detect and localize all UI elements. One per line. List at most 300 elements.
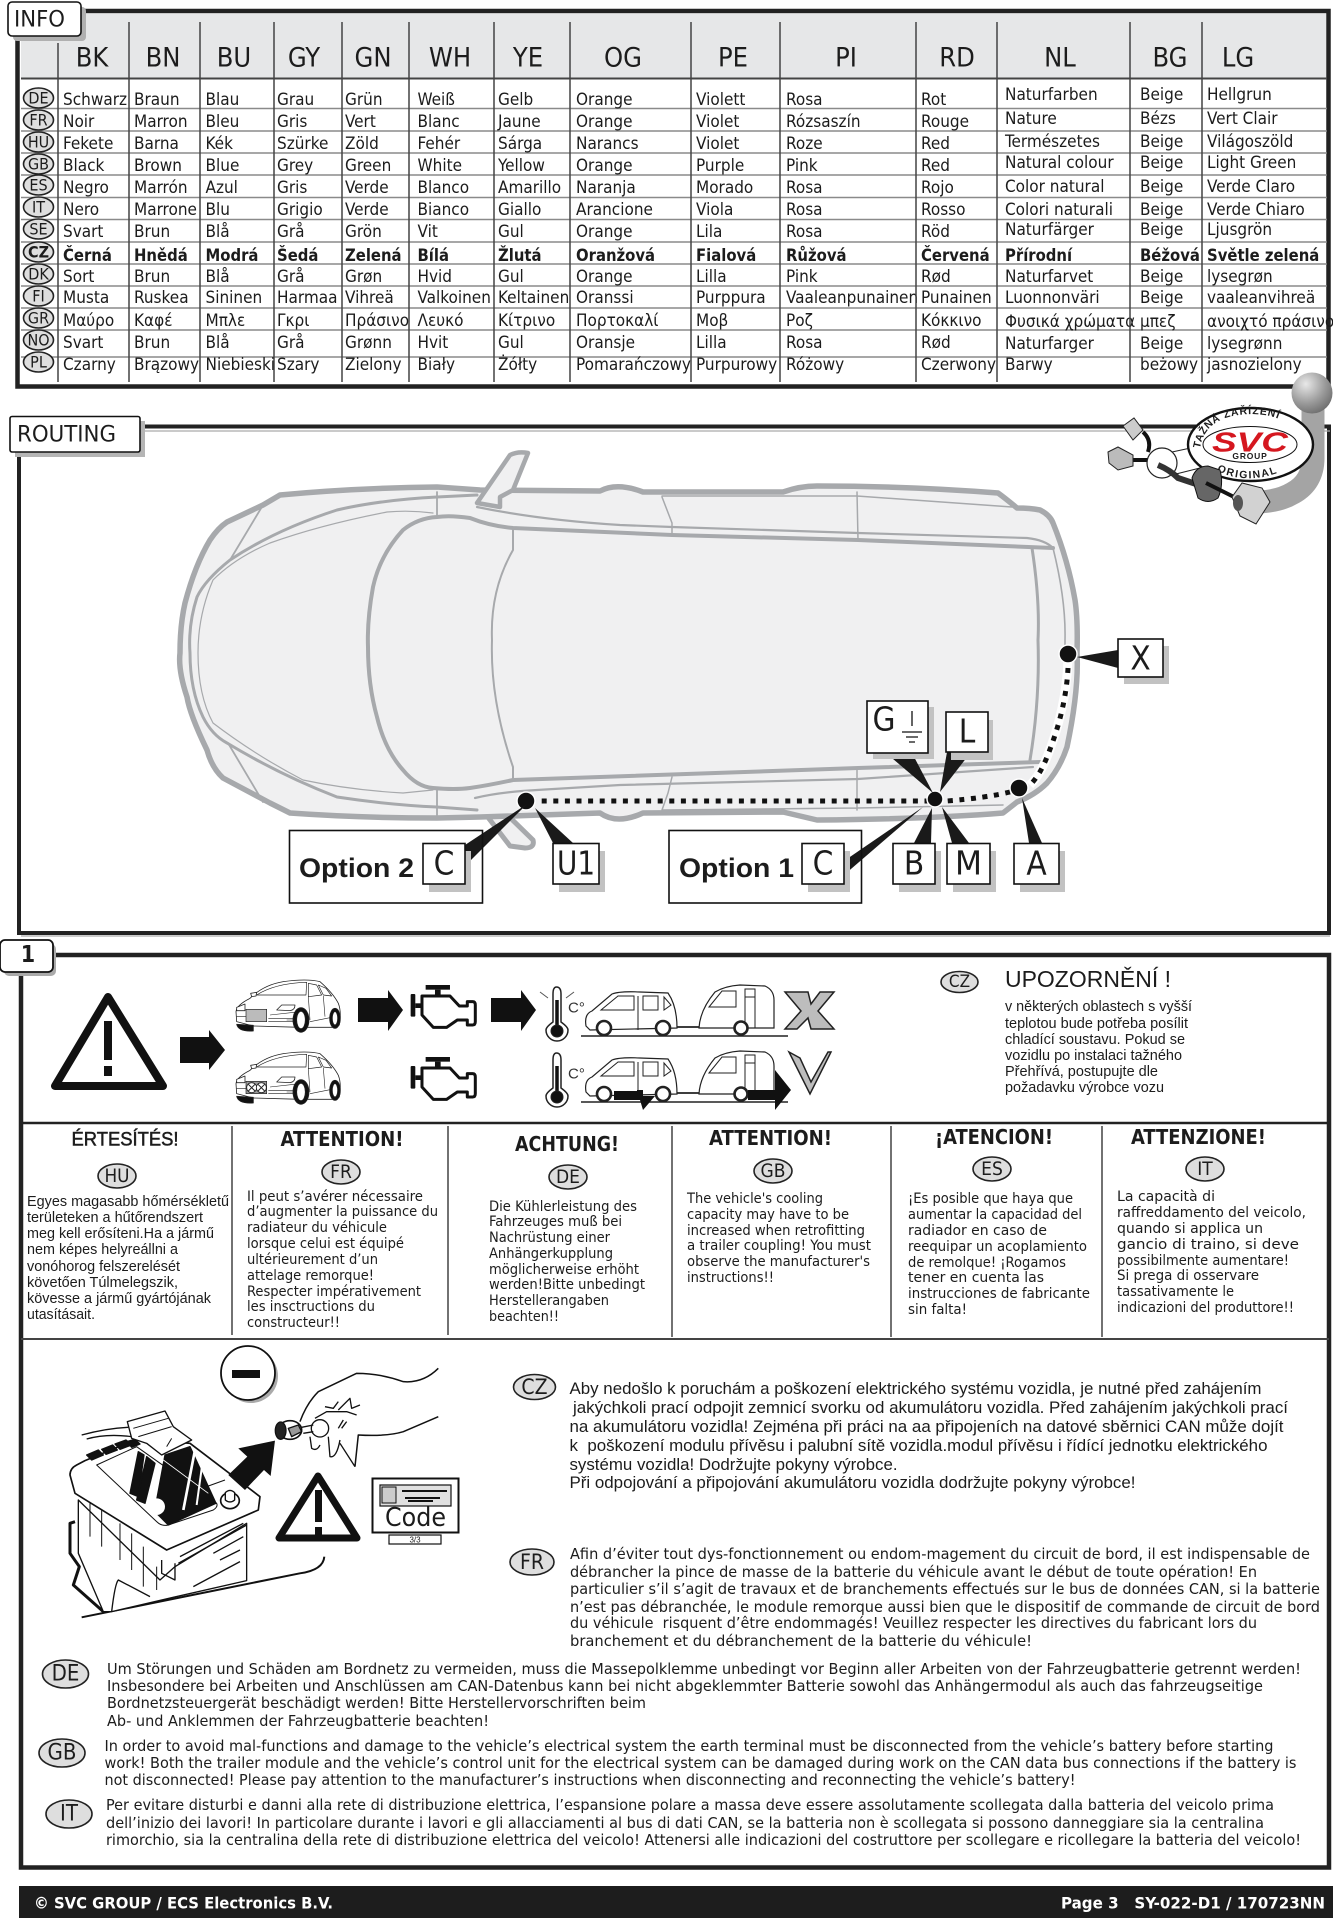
table rows: Gris [277, 178, 307, 198]
icon: warning triangle small [279, 1476, 357, 1538]
badge: CZ: CZ [949, 972, 970, 992]
column headers: GN [354, 42, 392, 74]
notice: ES: ¡ATENCION! [935, 1125, 1053, 1149]
option box 2 [290, 830, 482, 903]
table rows: Gul [498, 267, 524, 287]
notice: HU: Egyes magasabb hőmérsékletű [27, 1194, 229, 1210]
notice: ES [908, 1125, 1090, 1318]
table rows: Orange [576, 267, 633, 287]
table rows: μπεζ [1140, 312, 1176, 332]
language badges: DK [28, 264, 49, 284]
notice: HU: ÉRTESÍTÉS! [72, 1130, 178, 1150]
table rows: Bézs [1140, 109, 1176, 129]
table rows: Kék [206, 134, 233, 154]
table rows: Blu [206, 200, 230, 220]
table rows: Violett [696, 90, 745, 110]
table rows: Sininen [206, 288, 262, 308]
text: GB battery: In order to avoid mal-functions and damage to the vehicle’s electrical system the earth terminal must be disconnected from the vehicle’s battery before starting [104, 1737, 1274, 1755]
label: X: X [1130, 638, 1151, 678]
text: CZ cooling [1005, 999, 1192, 1096]
table rows: Luonnonväri [1005, 288, 1100, 308]
table rows: Colori naturali [1005, 200, 1113, 220]
text: CZ cooling: požadavku výrobce vozu [1005, 1080, 1164, 1096]
notice: IT: IT [1197, 1158, 1213, 1180]
table rows: Gul [498, 333, 524, 353]
notice: HU: kövesse a jármű gyártójának [27, 1291, 212, 1307]
icon: cross mark [785, 992, 834, 1029]
heading: UPOZORNĚNÍ: UPOZORNĚNÍ ! [1005, 966, 1171, 992]
table rows: Béžová [1140, 246, 1200, 264]
table rows: jasnozielony [1206, 355, 1302, 375]
column headers: WH [429, 42, 471, 74]
notice: FR: radiateur du véhicule [247, 1220, 387, 1236]
table rows: Szary [277, 355, 319, 375]
notice: GB [686, 1126, 871, 1286]
language badges: PL [30, 352, 47, 372]
table rows: Világoszöld [1207, 132, 1293, 152]
label: G with ground symbol: G [872, 700, 896, 738]
table rows: Verde Claro [1207, 177, 1295, 197]
text: CZ battery: Aby nedošlo k poruchám a poškození elektrického systému vozidla, je nutné před zahájením [570, 1380, 1262, 1398]
table rows: Ruskea [134, 288, 189, 308]
label: C option 1 [802, 844, 850, 892]
table rows: Rojo [921, 178, 954, 198]
icon: warning triangle [55, 997, 163, 1086]
notice: IT: La capacità di [1117, 1189, 1215, 1205]
notice: DE: Nachrüstung einer [489, 1230, 611, 1246]
table rows: Vert [345, 112, 376, 132]
table rows: Grün [345, 90, 383, 110]
text: IT battery: dell’inizio dei lavori! In particolare durante i lavori e gli allacciamenti al bus di dati CAN, se la batteria non è scollegata si possono danneggiare sia la centralina [106, 1814, 1264, 1832]
table rows: Beige [1140, 85, 1183, 105]
table rows: Grå [277, 221, 305, 242]
notice: FR: lorsque celui est équipé [247, 1236, 404, 1252]
table rows: Weiß [418, 90, 455, 110]
table rows: Beige [1140, 334, 1183, 354]
notice: ES: ¡Es posible que haya que [908, 1191, 1073, 1207]
frame [19, 426, 1329, 933]
table rows: Roze [786, 134, 823, 154]
table rows: Blå [206, 221, 230, 242]
icon: engine warning bottom [411, 1057, 475, 1099]
table rows: Γκρι [277, 311, 309, 331]
table rows: Jaune [497, 112, 541, 132]
text: GB battery: GB [48, 1740, 76, 1766]
table rows: Vaaleanpunainen [786, 288, 918, 308]
table rows: vaaleanvihreä [1207, 288, 1315, 308]
icon: car and caravan with arrow [546, 1051, 791, 1110]
table rows: Természetes [1004, 132, 1100, 152]
option box 1: Option 1 [679, 853, 794, 883]
towbar [1255, 400, 1313, 502]
table rows: Μοβ [696, 311, 728, 331]
column headers: RD [939, 42, 975, 74]
notice: ES: ES [981, 1158, 1003, 1180]
option box 1 [669, 830, 862, 903]
table rows: Viola [696, 200, 733, 220]
table rows: Beige [1140, 267, 1183, 287]
icon: car with fan [236, 1052, 340, 1104]
notice: GB: increased when retrofitting [687, 1223, 865, 1239]
table rows: Biały [418, 355, 455, 375]
notice: DE [489, 1132, 645, 1325]
table rows: White [418, 156, 462, 176]
notice: HU: HU [104, 1165, 130, 1187]
text: DE battery: Um Störungen und Schäden am Bordnetz zu vermeiden, muss die Massepolklemme unbedingt vor Beginn aller Arbeiten von der Fahrzeugbatterie getrennt werden! [107, 1660, 1301, 1678]
table rows: Blå [206, 266, 230, 287]
label: C option 1: C [813, 844, 833, 882]
icon: radio code: 3/3 [409, 1536, 421, 1544]
table rows: Pomarańczowy [576, 355, 691, 375]
column headers: PE [718, 42, 748, 74]
table rows: Grigio [277, 200, 323, 220]
table rows: Hvid [418, 267, 452, 287]
table rows: Λευκό [418, 311, 463, 331]
notice: GB: GB [761, 1160, 785, 1182]
table rows: Κίτρινο [498, 311, 555, 331]
table rows: Fekete [63, 134, 113, 154]
table rows: Valkoinen [418, 288, 491, 308]
table rows: Green [345, 156, 391, 176]
label: C option 2 [423, 844, 471, 892]
table rows: Gul [498, 222, 524, 242]
language badges: ES [29, 176, 48, 194]
table rows: Red [921, 134, 950, 154]
panel: INFO colour table [8, 2, 1333, 386]
notice: HU: utasításait. [27, 1307, 95, 1323]
notice: IT: gancio di traino, si deve [1117, 1237, 1299, 1253]
table rows: Beige [1140, 132, 1183, 152]
table rows: Modrá [206, 246, 258, 264]
notice: HU: nem képes helyreállni a [27, 1242, 179, 1258]
table rows: ανοιχτό πράσινο [1207, 312, 1333, 332]
table rows: Orange [576, 222, 633, 242]
logo oval: TAŽNÁ ZAŘÍZENÍ [1192, 404, 1282, 448]
table rows: Verde Chiaro [1207, 200, 1305, 220]
language badges: FI [32, 286, 45, 306]
table rows: Beige [1140, 153, 1183, 173]
table rows: Naturfärger [1005, 220, 1095, 240]
table rows: Blau [206, 90, 239, 110]
logo: SVC towbar and wiring kit [1108, 372, 1332, 525]
notice: IT: possibilmente aumentare! [1117, 1253, 1289, 1269]
text: CZ cooling: vozidlu po instalaci tažného [1005, 1048, 1182, 1064]
label: C option 2: C [434, 844, 454, 882]
text: CZ battery [514, 1374, 1288, 1492]
table rows: Harmaa [277, 288, 338, 308]
table rows: Rot [921, 90, 946, 110]
table rows: Šedá [277, 246, 318, 264]
notice: DE: beachten!! [489, 1309, 559, 1325]
icon: radio code: Code [385, 1503, 446, 1533]
table rows: Violet [696, 112, 739, 132]
text: FR battery: n’est pas débranchée, le module remorque aussi bien que le dispositif de commande de circuit de bord [570, 1598, 1320, 1616]
table rows: Μαύρο [63, 311, 114, 331]
table rows: Zelená [345, 246, 402, 264]
label: U1 [553, 844, 605, 892]
notice: HU: területeken a hűtőrendszert [27, 1210, 203, 1226]
notice: FR: ultérieurement d’un [247, 1252, 378, 1268]
label: X [1118, 638, 1169, 684]
icon: minus terminal [221, 1346, 278, 1403]
text: CZ cooling: teplotou bude potřeba posílit [1005, 1016, 1188, 1032]
text: FR battery: particulier s’il s’agit de travaux et de branchements effectués sur le bus de données CAN, si la batterie [570, 1580, 1320, 1598]
table rows: Žlutá [498, 246, 542, 264]
notice: GB: The vehicle's cooling [686, 1191, 823, 1207]
table rows: Κόκκινο [921, 311, 981, 331]
table rows: Brun [134, 222, 170, 242]
notice: DE: Fahrzeuges muß bei [489, 1214, 622, 1230]
logo oval: ORIGINAL [1218, 465, 1277, 478]
table rows: Černá [63, 246, 112, 264]
notice: HU: követően Túlmelegszik, [27, 1275, 178, 1291]
option box 2: Option 2 [299, 853, 414, 883]
notice: IT: raffreddamento del veicolo, [1117, 1205, 1306, 1221]
table rows: Verde [345, 178, 389, 198]
table rows: Blanc [418, 112, 460, 132]
text: FR battery: branchement et du débranchement de la batterie du véhicule! [570, 1632, 1032, 1650]
table rows [63, 85, 1333, 375]
notice: DE: DE [556, 1166, 580, 1188]
label: ROUTING [10, 416, 145, 457]
table rows: Naturfarben [1005, 85, 1098, 105]
flange and socket [1192, 466, 1270, 524]
table rows: Czerwony [921, 355, 996, 375]
arrow [358, 990, 403, 1031]
table rows: Naturfarvet [1005, 267, 1093, 287]
table rows: Φυσικά χρώματα [1005, 312, 1135, 332]
label: U1: U1 [557, 844, 595, 882]
table rows: Vihreä [345, 288, 394, 308]
table rows: Gris [277, 112, 307, 132]
table rows: Πράσινο [345, 311, 409, 331]
label: B [893, 844, 941, 892]
table rows: Azul [206, 178, 238, 198]
table rows: Gelb [498, 90, 533, 110]
table rows: Purple [696, 156, 744, 176]
table rows: Röd [921, 222, 950, 242]
table rows: Rouge [921, 112, 969, 132]
text: IT battery [46, 1796, 1301, 1849]
language badges: NO [27, 330, 50, 350]
table rows: Bleu [206, 112, 239, 132]
icon: engine warning top [411, 985, 475, 1027]
language badges: DE [28, 88, 49, 108]
table rows: Naranja [576, 178, 636, 198]
notice: ES: instrucciones de fabricante [908, 1286, 1090, 1302]
table rows: Blanco [418, 178, 469, 198]
table rows: Color natural [1005, 177, 1104, 197]
table rows: Ljusgrön [1207, 220, 1272, 240]
text: CZ cooling: Přehřívá, postupujte dle [1005, 1064, 1158, 1080]
label: G with ground symbol [867, 700, 934, 759]
table rows: Keltainen [498, 288, 569, 308]
table rows: Arancione [576, 200, 653, 220]
text: FR battery: Afin d’éviter tout dys-fonctionnement ou endom-magement du circuit de bord, il est indispensable de [570, 1545, 1310, 1563]
notice: IT [1117, 1125, 1306, 1316]
column headers: BU [217, 42, 251, 74]
table rows: Rosa [786, 333, 823, 353]
table rows: Morado [696, 178, 753, 198]
notice: HU: meg kell erősíteni.Ha a jármű [27, 1226, 214, 1242]
notice: IT: quando si applica un [1117, 1221, 1263, 1237]
text: FR battery: FR [520, 1550, 544, 1574]
table rows: Rosa [786, 200, 823, 220]
table rows: Grå [277, 266, 305, 287]
text: FR battery: débrancher la pince de masse de la batterie du véhicule avant le début de toute opération! En [570, 1563, 1257, 1581]
notice: GB: a trailer coupling! You must [687, 1238, 871, 1254]
notice: FR: les insctructions du [247, 1299, 375, 1315]
table rows: Grön [345, 222, 382, 242]
wiring harness [1108, 418, 1200, 484]
notice: DE: Die Kühlerleistung des [489, 1199, 637, 1215]
notice: HU: vonóhorog felszerelését [27, 1259, 180, 1275]
table rows: Rosa [786, 178, 823, 198]
column headers: BG [1152, 42, 1188, 74]
text: CZ battery: na akumulátoru vozidla! Zejména při práci na aa připojeních na datové sběrnici CAN může dojít [570, 1418, 1284, 1436]
table rows: Blue [206, 156, 239, 176]
notice: IT: indicazioni del produttore!! [1117, 1300, 1294, 1316]
table rows: Fialová [696, 246, 756, 264]
table rows: Grau [277, 90, 314, 110]
column headers: OG [604, 42, 642, 74]
table rows: Natural colour [1005, 153, 1114, 173]
table rows: Lila [696, 222, 722, 242]
notice: ES: de remolque! ¡Rogamos [908, 1255, 1066, 1271]
panel: ROUTING [10, 416, 1330, 936]
table rows: Marron [134, 112, 188, 132]
table rows: Noir [63, 112, 95, 132]
text: GB battery: work! Both the trailer module and the vehicle’s control unit for the electrical system can be damaged during work on the CAN data bus connections if the battery is [104, 1754, 1296, 1772]
text: IT battery: Per evitare disturbi e danni alla rete di distribuzione elettrica, l’espansione polare a massa deve essere assolutamente scollegata dalla batteria del veicolo prima [106, 1796, 1274, 1814]
table rows: Hellgrun [1207, 85, 1272, 105]
table rows: Grønn [345, 333, 392, 353]
table rows: Brown [134, 156, 182, 176]
table rows: Purpurowy [696, 355, 777, 375]
table rows: Pink [786, 156, 818, 176]
table rows: Red [921, 156, 950, 176]
notice: ES: reequipar un acoplamiento [908, 1239, 1087, 1255]
table rows: Oranžová [576, 246, 655, 264]
table rows: Barwy [1005, 355, 1053, 375]
table rows: Narancs [576, 134, 639, 154]
logo oval: SVC [1212, 426, 1289, 458]
table rows: Orange [576, 112, 633, 132]
text: CZ battery: jakýchkoli prací odpojit zemnicí svorku od akumulátoru vozidla. Před zahájením jakýchkoli prací [572, 1399, 1288, 1417]
table rows: Bianco [418, 200, 469, 220]
table rows: Beige [1140, 288, 1183, 308]
label: 1 [0, 940, 56, 976]
label: INFO [8, 2, 86, 41]
text: FR battery [510, 1545, 1320, 1650]
label: 1: 1 [21, 942, 35, 968]
notice: FR [247, 1127, 438, 1331]
text: CZ battery: k poškození modulu přívěsu i palubní sítě vozidla.modul přívěsu i řídící jednotku elektrického [570, 1437, 1268, 1455]
table rows: Sárga [498, 134, 542, 154]
label: INFO: INFO [14, 8, 65, 32]
table rows: Naturfarger [1005, 334, 1095, 354]
table rows: Brun [134, 333, 170, 353]
table rows: Marrón [134, 178, 188, 198]
notice: FR: Il peut s’avérer nécessaire [247, 1189, 423, 1205]
notice: ES: sin falta! [908, 1302, 967, 1318]
table rows: Marrone [134, 200, 197, 220]
table rows: beżowy [1140, 355, 1198, 375]
table rows: Różowy [786, 355, 844, 375]
notice: FR: Respecter impérativement [247, 1284, 421, 1300]
table rows: Braun [134, 90, 180, 110]
table rows: Vit [418, 222, 438, 242]
table rows: Musta [63, 288, 109, 308]
icon: radio code [372, 1478, 458, 1544]
notice: IT: ATTENZIONE! [1131, 1125, 1266, 1149]
table rows: Růžová [786, 246, 847, 264]
footer bar: Page 3 SY-022-D1 / 170723NN [1061, 1894, 1325, 1912]
arrow [180, 1030, 225, 1070]
text: IT battery: IT [60, 1802, 79, 1826]
notice: FR: attelage remorque! [247, 1268, 374, 1284]
text: GB battery [39, 1737, 1296, 1789]
table rows: Amarillo [498, 178, 561, 198]
table rows: Rózsaszín [786, 112, 861, 132]
text: FR battery: du véhicule risquent d’être endommagés! Veuillez respecter les directives du fabricant lors du [570, 1614, 1257, 1632]
notice: GB: capacity may have to be [687, 1207, 849, 1223]
panel: section 1 cooling and battery notices [0, 940, 1329, 1868]
logo oval [1186, 404, 1314, 482]
table rows: Μπλε [206, 311, 245, 331]
table rows: Black [63, 156, 105, 176]
table rows: Fehér [418, 134, 461, 154]
table rows: Vert Clair [1207, 109, 1278, 129]
table rows: Sort [63, 267, 94, 287]
frame [21, 955, 1329, 1868]
table rows: Oranssi [576, 288, 634, 308]
table rows: Blå [206, 332, 230, 353]
language badges: GB [28, 154, 49, 174]
text: DE battery: DE [52, 1662, 79, 1686]
notice: IT: tassativamente le [1117, 1284, 1234, 1300]
notice: GB: instructions!! [687, 1270, 774, 1286]
table rows: Grå [277, 332, 305, 353]
table rows: Light Green [1207, 153, 1296, 173]
table rows: Niebieski [206, 355, 275, 375]
table rows: Nero [63, 200, 99, 220]
table rows: Grey [277, 156, 313, 176]
label: M: M [955, 844, 982, 882]
table rows: Bílá [418, 246, 449, 264]
column headers: BN [146, 42, 180, 74]
table rows: Hnědá [134, 246, 188, 264]
table rows: Beige [1140, 220, 1183, 240]
table rows: Svart [63, 333, 103, 353]
column headers: GY [288, 42, 320, 74]
table rows: Orange [576, 90, 633, 110]
table rows: Červená [921, 246, 990, 264]
footer bar [19, 1886, 1333, 1918]
notice: ES: aumentar la capacidad del [908, 1207, 1082, 1223]
notice: DE: Anhängerkupplung [489, 1246, 613, 1262]
table rows: Oransje [576, 333, 635, 353]
label: L [946, 712, 993, 760]
table rows: lysegrøn [1207, 267, 1273, 287]
table rows: Purppura [696, 288, 766, 308]
language badges: FR [29, 110, 48, 130]
pointers [465, 650, 1118, 875]
table rows: Żółty [498, 354, 537, 375]
table rows: Barna [134, 134, 179, 154]
notice: DE: möglicherweise erhöht [489, 1262, 639, 1278]
frame [18, 11, 1328, 386]
